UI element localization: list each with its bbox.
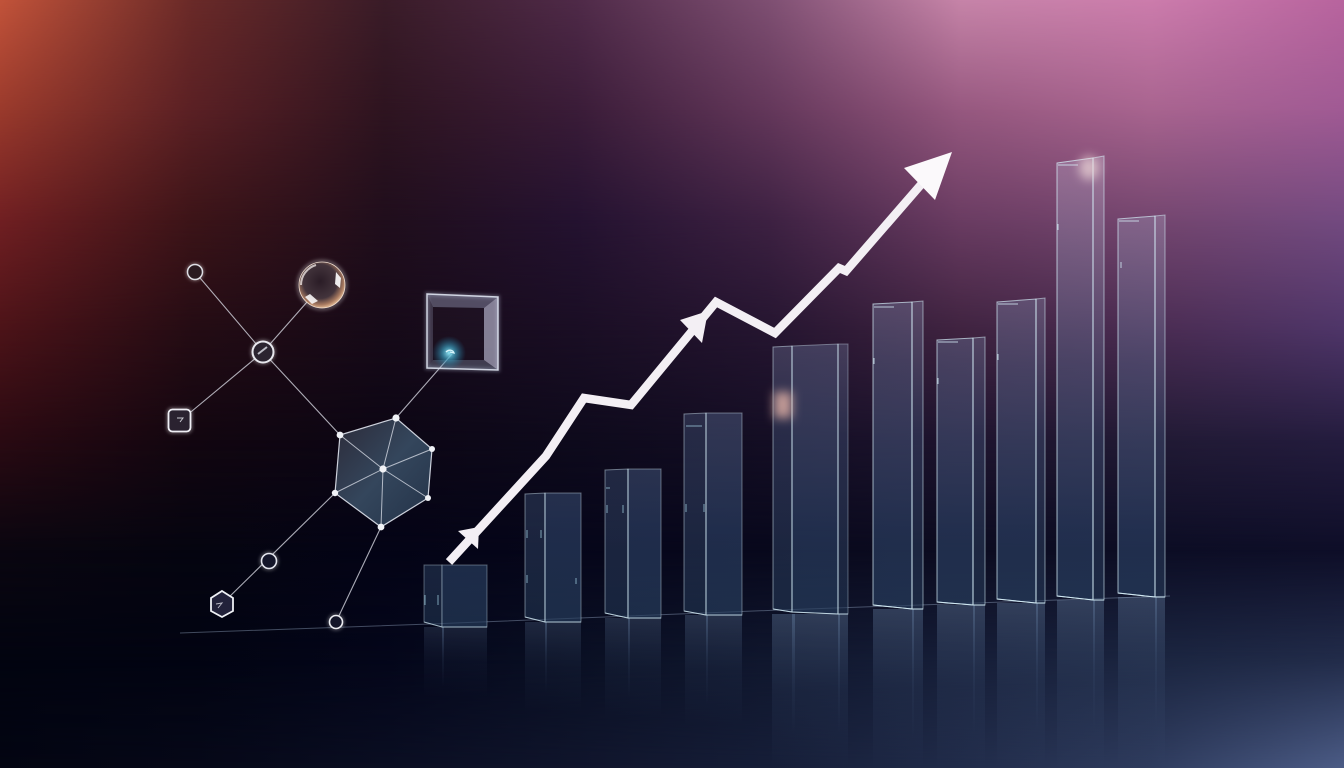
- bar 2: [525, 493, 581, 622]
- bar chart: glass bars: [424, 156, 1165, 627]
- bar 9: [1057, 156, 1104, 600]
- bar 7: [937, 337, 985, 605]
- glass cube: [427, 294, 498, 370]
- node: middle ring: [252, 341, 274, 363]
- node: small hexagon: [211, 591, 233, 617]
- bar 8: [997, 298, 1045, 603]
- connector lines: [180, 272, 452, 622]
- node: bottom circle: [329, 615, 343, 629]
- node: lower circle: [261, 553, 277, 569]
- node: glass sphere: [298, 261, 346, 309]
- growth arrow: [449, 152, 952, 562]
- node: small top left: [188, 264, 202, 280]
- bar 5: [773, 344, 848, 614]
- floor reflections of the bars: [424, 597, 1165, 768]
- horizon line: [180, 596, 1170, 633]
- bar 6: [873, 301, 923, 609]
- network diagram: [168, 261, 498, 629]
- bar 3: [605, 469, 661, 618]
- bar 1: [424, 565, 487, 627]
- bar 4: [684, 413, 742, 615]
- bar 10: [1118, 215, 1165, 597]
- hexagon node: [332, 414, 435, 530]
- node: rounded square: [168, 409, 191, 432]
